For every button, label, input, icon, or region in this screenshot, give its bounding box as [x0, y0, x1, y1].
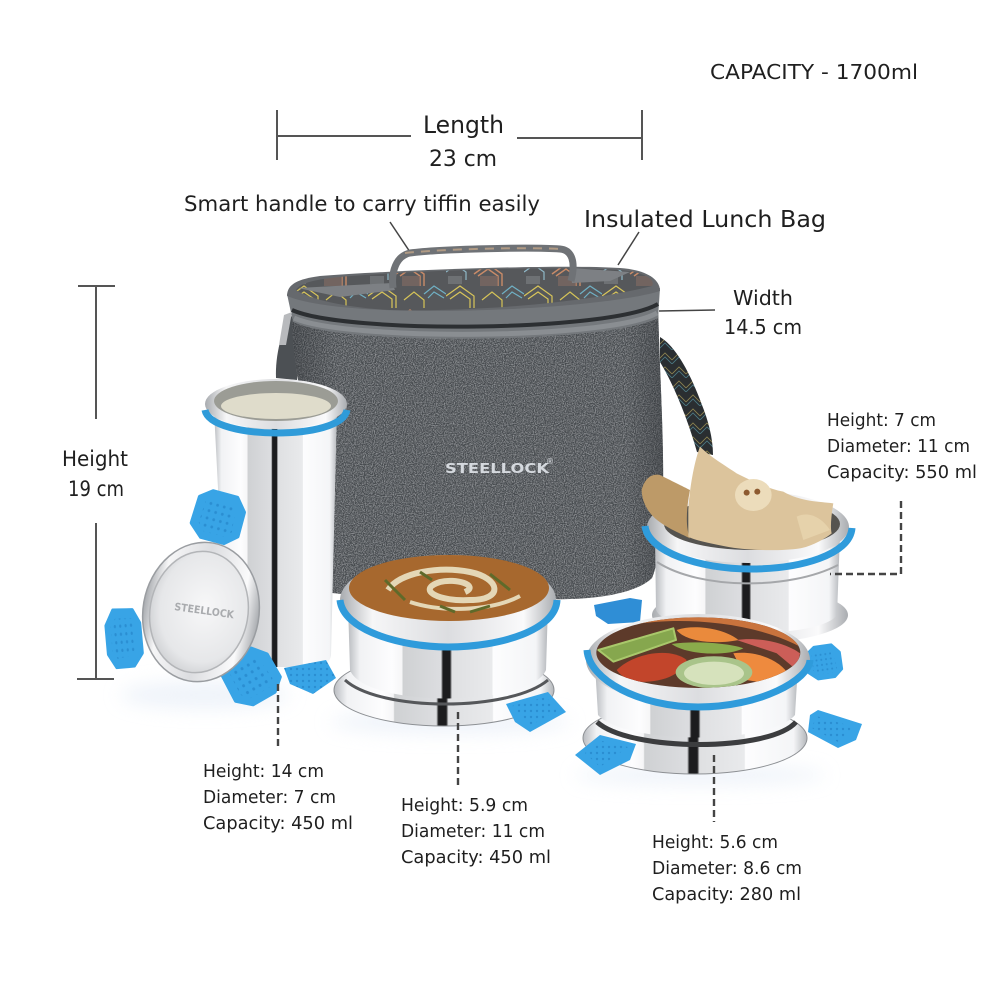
tumbler specs: Height: 14 cm	[203, 762, 324, 782]
salad specs: Height: 5.6 cm	[652, 833, 778, 853]
roti right tab	[805, 644, 843, 680]
salad vegetables	[596, 613, 800, 688]
roti left tab	[594, 598, 642, 624]
salad left tab	[575, 735, 636, 775]
lid tabs	[189, 488, 247, 546]
roti specs: Diameter: 11 cm	[827, 437, 970, 457]
rotis	[642, 447, 833, 550]
insulated bag callout: Insulated Lunch Bag	[584, 207, 826, 233]
tumbler	[205, 379, 347, 667]
soft floor shadows	[120, 681, 825, 785]
capacity heading: CAPACITY - 1700ml	[710, 60, 918, 84]
salad specs: Diameter: 8.6 cm	[652, 859, 802, 879]
dal base ring	[334, 654, 554, 726]
height value: 19 cm	[68, 477, 124, 501]
width callout	[659, 286, 802, 339]
salad blue band	[587, 650, 810, 707]
lid disc	[132, 533, 270, 691]
width callout: Width	[733, 286, 793, 310]
dal specs: Height: 5.9 cm	[401, 796, 528, 816]
brand logo on bag: STEELLOCK	[445, 461, 550, 477]
roti base	[652, 587, 848, 643]
length label: Length	[423, 111, 504, 139]
dal right tab	[506, 692, 566, 732]
salad body	[595, 665, 798, 738]
salad container	[575, 613, 862, 775]
dal body	[348, 605, 548, 698]
roti specs: Capacity: 550 ml	[827, 463, 977, 483]
salad specs: Capacity: 280 ml	[652, 885, 801, 905]
height label: Height	[62, 447, 128, 471]
carry handle	[393, 248, 573, 288]
height dimension	[62, 286, 128, 679]
loose lid	[104, 488, 285, 711]
handle callout: Smart handle to carry tiffin easily	[184, 192, 540, 216]
handle foot flaps	[298, 268, 630, 297]
roti specs	[827, 411, 977, 574]
lid brand: STEELLOCK	[174, 601, 235, 621]
right strap	[660, 337, 713, 455]
tumbler body	[214, 410, 337, 667]
dal container	[284, 555, 566, 732]
left strap	[276, 316, 300, 380]
bag body	[292, 305, 663, 600]
tumbler specs: Capacity: 450 ml	[203, 814, 353, 834]
length dimension	[277, 110, 642, 172]
dal rim	[340, 555, 556, 645]
roti blue band	[645, 526, 852, 569]
insulated lunch bag	[276, 248, 713, 600]
roti rim	[647, 491, 849, 563]
roti specs: Height: 7 cm	[827, 411, 936, 431]
tumbler blue band	[205, 410, 347, 433]
handle callout	[184, 192, 540, 252]
width callout: 14.5 cm	[724, 315, 802, 339]
tumbler contents	[205, 379, 347, 429]
tumbler specs	[203, 684, 353, 834]
tumbler specs: Diameter: 7 cm	[203, 788, 336, 808]
salad specs	[652, 755, 802, 905]
zip band	[287, 288, 660, 339]
dal specs: Diameter: 11 cm	[401, 822, 545, 842]
salad base ring	[583, 702, 807, 774]
patterned lid	[287, 267, 660, 311]
roti container	[594, 447, 852, 680]
dal food	[349, 555, 549, 621]
dal blue band	[340, 600, 557, 647]
dal specs: Capacity: 450 ml	[401, 848, 551, 868]
salad rim	[586, 614, 810, 706]
insulated bag callout	[584, 207, 826, 265]
dal left tab	[284, 660, 336, 694]
roti body	[655, 535, 840, 633]
length value: 23 cm	[429, 147, 497, 172]
insulated lunch bag: ®	[546, 457, 554, 466]
zip pull	[279, 312, 292, 345]
dal specs	[401, 712, 551, 868]
salad right tab	[808, 710, 862, 748]
